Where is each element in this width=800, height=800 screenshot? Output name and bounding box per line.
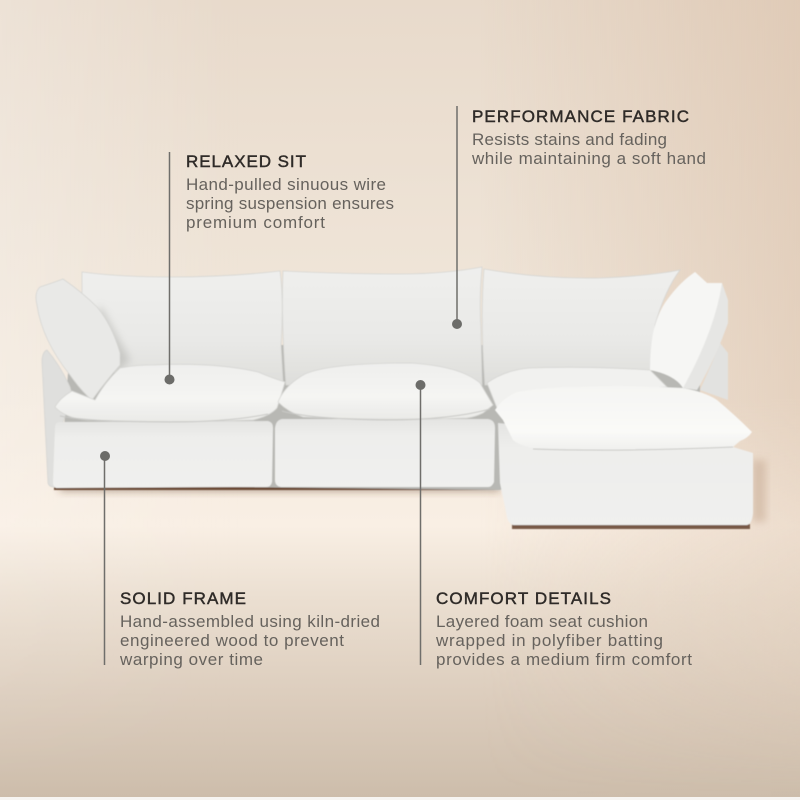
heading: PERFORMANCE FABRIC xyxy=(472,107,689,126)
description: engineered wood to prevent xyxy=(120,631,344,650)
right arm xyxy=(700,343,728,400)
pillow shadow on left back cushion xyxy=(90,305,130,380)
description: provides a medium firm comfort xyxy=(436,650,692,669)
leader line and dot xyxy=(452,106,462,329)
back cushion left xyxy=(82,271,283,385)
description: spring suspension ensures xyxy=(186,194,394,213)
callout: relaxed sit xyxy=(164,152,394,384)
callout: performance fabric xyxy=(452,106,706,329)
left arm xyxy=(42,350,72,487)
description xyxy=(435,612,692,669)
callout: solid frame xyxy=(100,451,380,669)
heading: COMFORT DETAILS xyxy=(436,589,611,608)
description: Resists stains and fading xyxy=(472,130,667,149)
right throw pillow xyxy=(650,272,728,390)
description: while maintaining a soft hand xyxy=(471,149,706,168)
left throw pillow xyxy=(36,279,120,400)
description: Hand-assembled using kiln-dried xyxy=(120,612,380,631)
description xyxy=(471,130,706,168)
description: warping over time xyxy=(119,650,263,669)
description xyxy=(186,175,394,232)
heading: SOLID FRAME xyxy=(120,589,246,608)
ottoman base xyxy=(498,423,753,525)
description: Hand-pulled sinuous wire xyxy=(186,175,386,194)
back cushion right xyxy=(482,269,680,385)
seat cushion left xyxy=(55,364,285,422)
leader line and dot xyxy=(416,380,426,665)
leader line and dot xyxy=(100,451,110,665)
ottoman cushion xyxy=(495,386,752,450)
description xyxy=(119,612,380,669)
description: premium comfort xyxy=(186,213,325,232)
leader line and dot xyxy=(164,152,174,384)
heading: RELAXED SIT xyxy=(186,152,306,171)
floor shadows under sofa xyxy=(54,460,766,529)
description: Layered foam seat cushion xyxy=(436,612,648,631)
sofa interior backing xyxy=(60,345,700,490)
seat cushion middle xyxy=(278,363,493,419)
base middle xyxy=(275,419,495,487)
seat cushion right, behind ottoman xyxy=(487,367,667,408)
callout: comfort details xyxy=(416,380,692,669)
illustration: white modular sectional sofa xyxy=(36,267,766,529)
base left xyxy=(53,421,273,488)
description: wrapped in polyfiber batting xyxy=(435,631,663,650)
back cushion middle xyxy=(282,267,482,385)
cushion shading lines xyxy=(60,409,733,450)
